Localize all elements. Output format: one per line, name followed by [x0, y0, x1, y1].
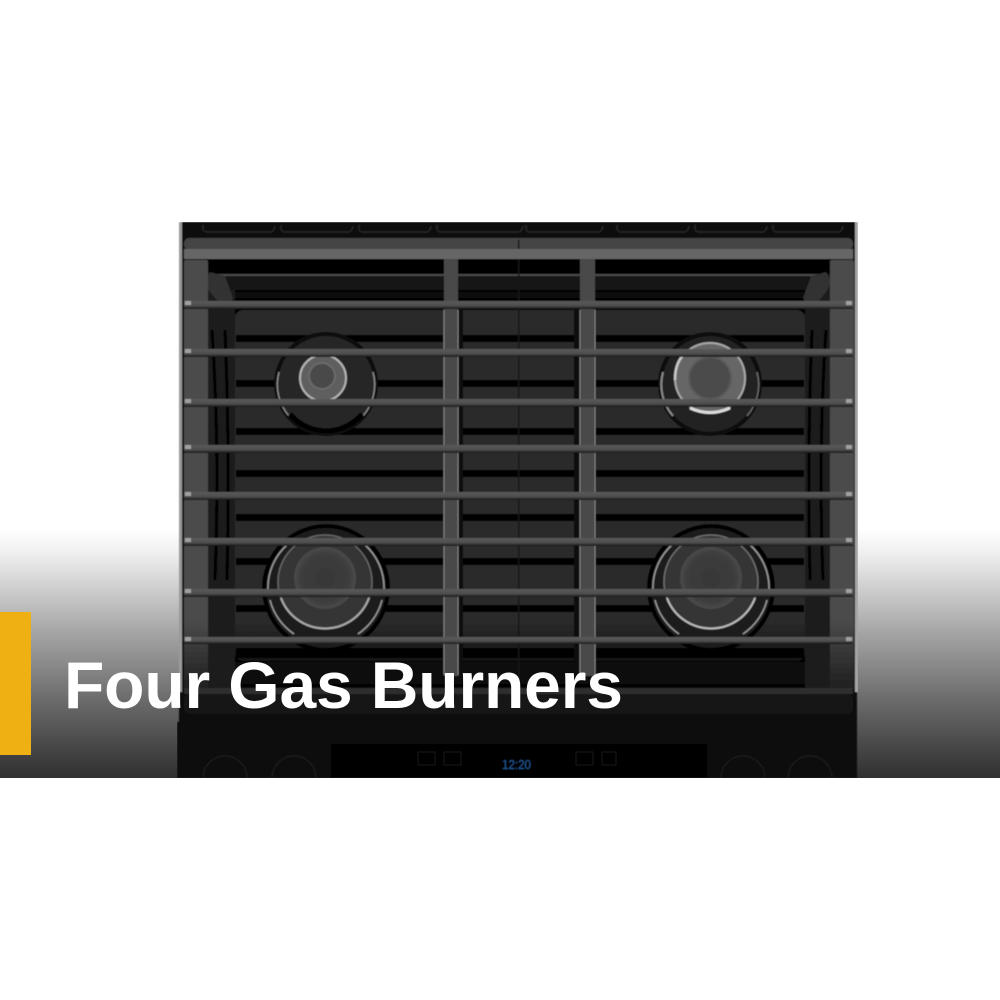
background gradient band	[0, 530, 1000, 778]
center seam	[518, 240, 520, 680]
burner: top right	[660, 334, 760, 434]
control panel	[177, 722, 845, 778]
knobs	[203, 756, 832, 778]
front edge	[184, 694, 853, 714]
horizontal grate bars	[184, 249, 853, 694]
oven buttons	[418, 752, 616, 765]
side pads	[184, 260, 854, 690]
title: Four Gas Burners	[64, 648, 623, 722]
yellow accent bar	[0, 612, 31, 755]
burner: top left	[276, 334, 376, 434]
reflection stripes	[236, 335, 804, 658]
grate bar end highlights	[185, 301, 852, 641]
rear vent slots	[203, 225, 843, 232]
cooktop surface	[184, 238, 853, 690]
vertical grate bars	[444, 258, 595, 676]
clock display: 12:20	[502, 758, 531, 772]
burner: bottom right	[649, 526, 773, 650]
burner: bottom left	[264, 526, 388, 650]
cooktop photo	[177, 222, 858, 778]
